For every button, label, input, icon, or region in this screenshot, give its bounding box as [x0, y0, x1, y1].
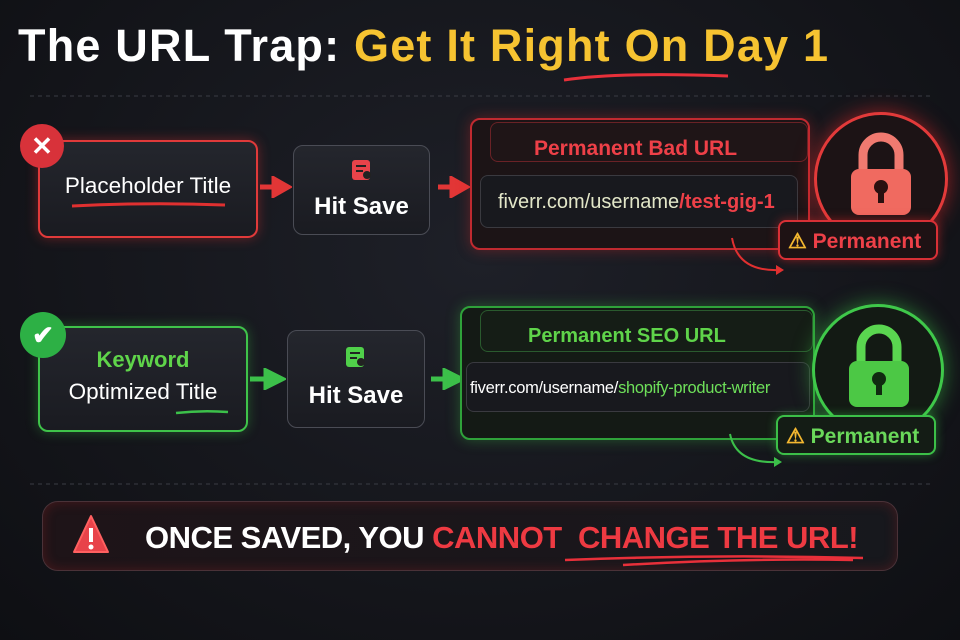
- icon: warning triangle: [73, 515, 109, 553]
- panel: bad row: [20, 98, 960, 275]
- panel: good row: [20, 292, 956, 467]
- panel: seo url: Permanent SEO URL: [528, 325, 726, 347]
- panel: bad url: fiverr.com/username/test-gig-1: [498, 191, 775, 213]
- icon: green lock: [812, 304, 944, 436]
- callout: warning banner: [42, 501, 898, 571]
- arrow: [250, 368, 286, 390]
- title: The URL Trap: Get It Right On Day 1: [18, 20, 829, 71]
- badge: permanent: ⚠ Permanent: [786, 425, 919, 448]
- arrow: curve: [731, 238, 784, 275]
- panel: bad url: [470, 118, 810, 250]
- icon: check badge: ✔: [32, 320, 54, 350]
- box: keyword optimized title: [38, 326, 248, 432]
- badge: permanent: ⚠ Permanent: [788, 230, 921, 253]
- panel: seo url: fiverr.com/username/shopify-product-writer: [470, 379, 770, 397]
- panel: seo url: [460, 306, 815, 440]
- box: placeholder title: [38, 140, 258, 238]
- icon: x badge: ✕: [31, 131, 53, 161]
- box: keyword optimized title: Optimized Title: [69, 379, 217, 404]
- arrow: [431, 368, 460, 390]
- icon: check badge: [20, 312, 66, 358]
- arrow: curve: [729, 434, 782, 467]
- box: placeholder title: Placeholder Title: [65, 173, 231, 198]
- box: hit save: [293, 145, 430, 235]
- badge: permanent: [778, 220, 938, 260]
- box: hit save: [287, 330, 425, 428]
- badge: permanent: [776, 415, 936, 455]
- arrow: [260, 176, 292, 198]
- arrow: [438, 176, 470, 198]
- box: hit save: Hit Save: [309, 382, 403, 409]
- callout: warning banner: ONCE SAVED, YOU CANNOT CHANGE THE URL!: [145, 520, 858, 555]
- box: keyword optimized title: Keyword: [97, 347, 189, 372]
- panel: bad url: Permanent Bad URL: [534, 137, 737, 160]
- box: hit save: Hit Save: [314, 193, 409, 220]
- icon: red lock: [814, 112, 948, 246]
- icon: x badge: [20, 124, 64, 168]
